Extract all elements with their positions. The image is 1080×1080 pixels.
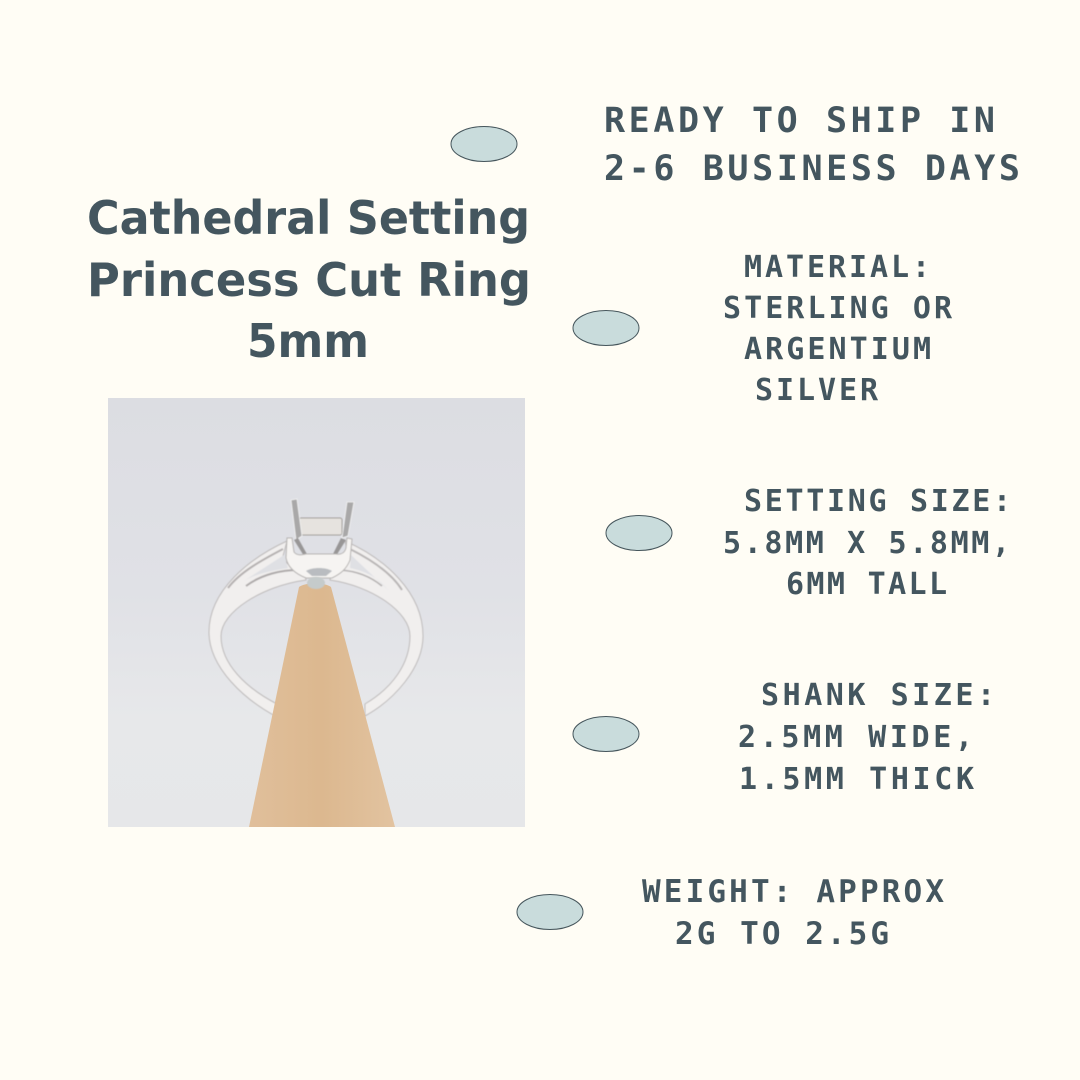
setting underside shadow (306, 568, 332, 576)
photo: ring on wooden cone (108, 398, 525, 827)
text: shank size: 2.5MM WIDE, (738, 720, 973, 755)
title (87, 191, 531, 368)
title: Princess Cut Ring (87, 253, 531, 307)
dot: shank size (573, 716, 639, 752)
text: setting size (723, 484, 1011, 602)
text: material: STERLING OR (723, 291, 953, 326)
text: material: SILVER (755, 373, 879, 408)
text: material (723, 250, 953, 408)
text: shank size: 1.5MM THICK (739, 762, 974, 797)
text: shipping time: READY TO SHIP IN (604, 101, 995, 141)
cone tip reflection (307, 577, 325, 589)
dot: setting size (606, 516, 672, 550)
text: setting size: 5.8MM X 5.8MM, (723, 526, 1010, 561)
dot: material (573, 310, 639, 346)
dot: weight (517, 894, 583, 930)
band highlights (228, 549, 283, 588)
text: weight (642, 874, 944, 952)
ring band (209, 541, 306, 717)
text: weight: WEIGHT: APPROX (642, 874, 944, 910)
back bar of setting (299, 518, 342, 535)
text: shank size (738, 678, 995, 797)
front basket (286, 538, 352, 578)
wooden cone (249, 583, 395, 827)
text: material: MATERIAL: (744, 250, 930, 285)
text: weight: 2G TO 2.5G (675, 916, 889, 952)
photo backdrop (108, 398, 525, 827)
text: shipping time: 2-6 BUSINESS DAYS (604, 149, 1020, 189)
text: shank size: SHANK SIZE: (761, 678, 995, 713)
title: Cathedral Setting (87, 191, 530, 245)
text: setting size: 6MM TALL (786, 567, 947, 602)
text: shipping time (604, 101, 1020, 189)
text: setting size: SETTING SIZE: (744, 484, 1011, 519)
dot: shipping (451, 126, 517, 162)
ring (209, 499, 423, 717)
gaps between shoulder bands (244, 555, 288, 581)
text: material: ARGENTIUM (744, 332, 931, 367)
prongs (291, 499, 302, 540)
title: 5mm (247, 314, 369, 368)
